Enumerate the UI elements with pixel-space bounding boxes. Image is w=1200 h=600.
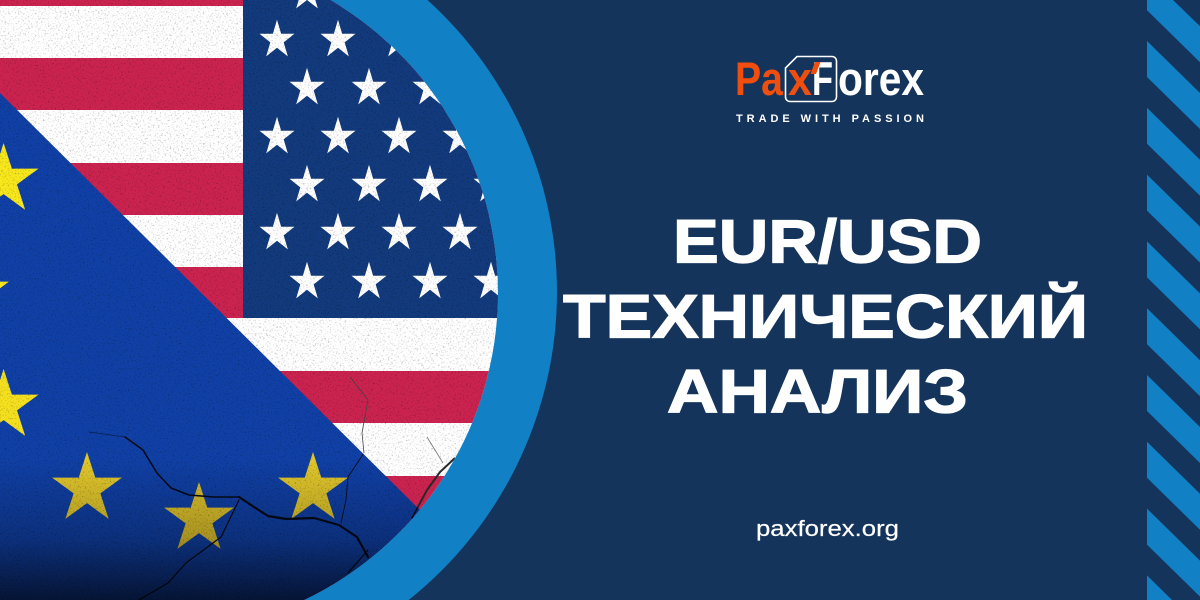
canton stars	[260, 0, 508, 298]
logo wordmark	[735, 52, 924, 105]
red stripes	[0, 0, 500, 600]
title line 2: ТЕХНИЧЕСКИЙ	[563, 282, 1088, 351]
logo wordmark: Pa	[735, 52, 784, 105]
tagline: TRADE WITH PASSION	[736, 113, 924, 125]
logo box	[786, 56, 836, 102]
title line 3: АНАЛИЗ	[667, 358, 968, 426]
eu flag	[0, 93, 428, 600]
logo tick	[810, 62, 820, 74]
blue ring	[0, 0, 557, 600]
logo	[735, 52, 924, 125]
website url: paxforex.org	[756, 516, 899, 541]
usa flag	[0, 0, 508, 600]
bottom shadow	[0, 470, 420, 600]
eu flag cracks	[89, 432, 427, 600]
title	[563, 208, 1088, 426]
diagonal stripes	[1147, 0, 1200, 600]
eu stars	[0, 143, 348, 549]
usa flag cracks	[350, 377, 455, 518]
canton	[243, 0, 500, 318]
circular flag photo	[0, 0, 508, 600]
logo wordmark: x	[788, 52, 812, 105]
logo wordmark: orex	[838, 52, 924, 105]
title line 1: EUR/USD	[673, 208, 982, 276]
logo wordmark: F	[812, 52, 833, 105]
surface grain	[0, 0, 500, 600]
